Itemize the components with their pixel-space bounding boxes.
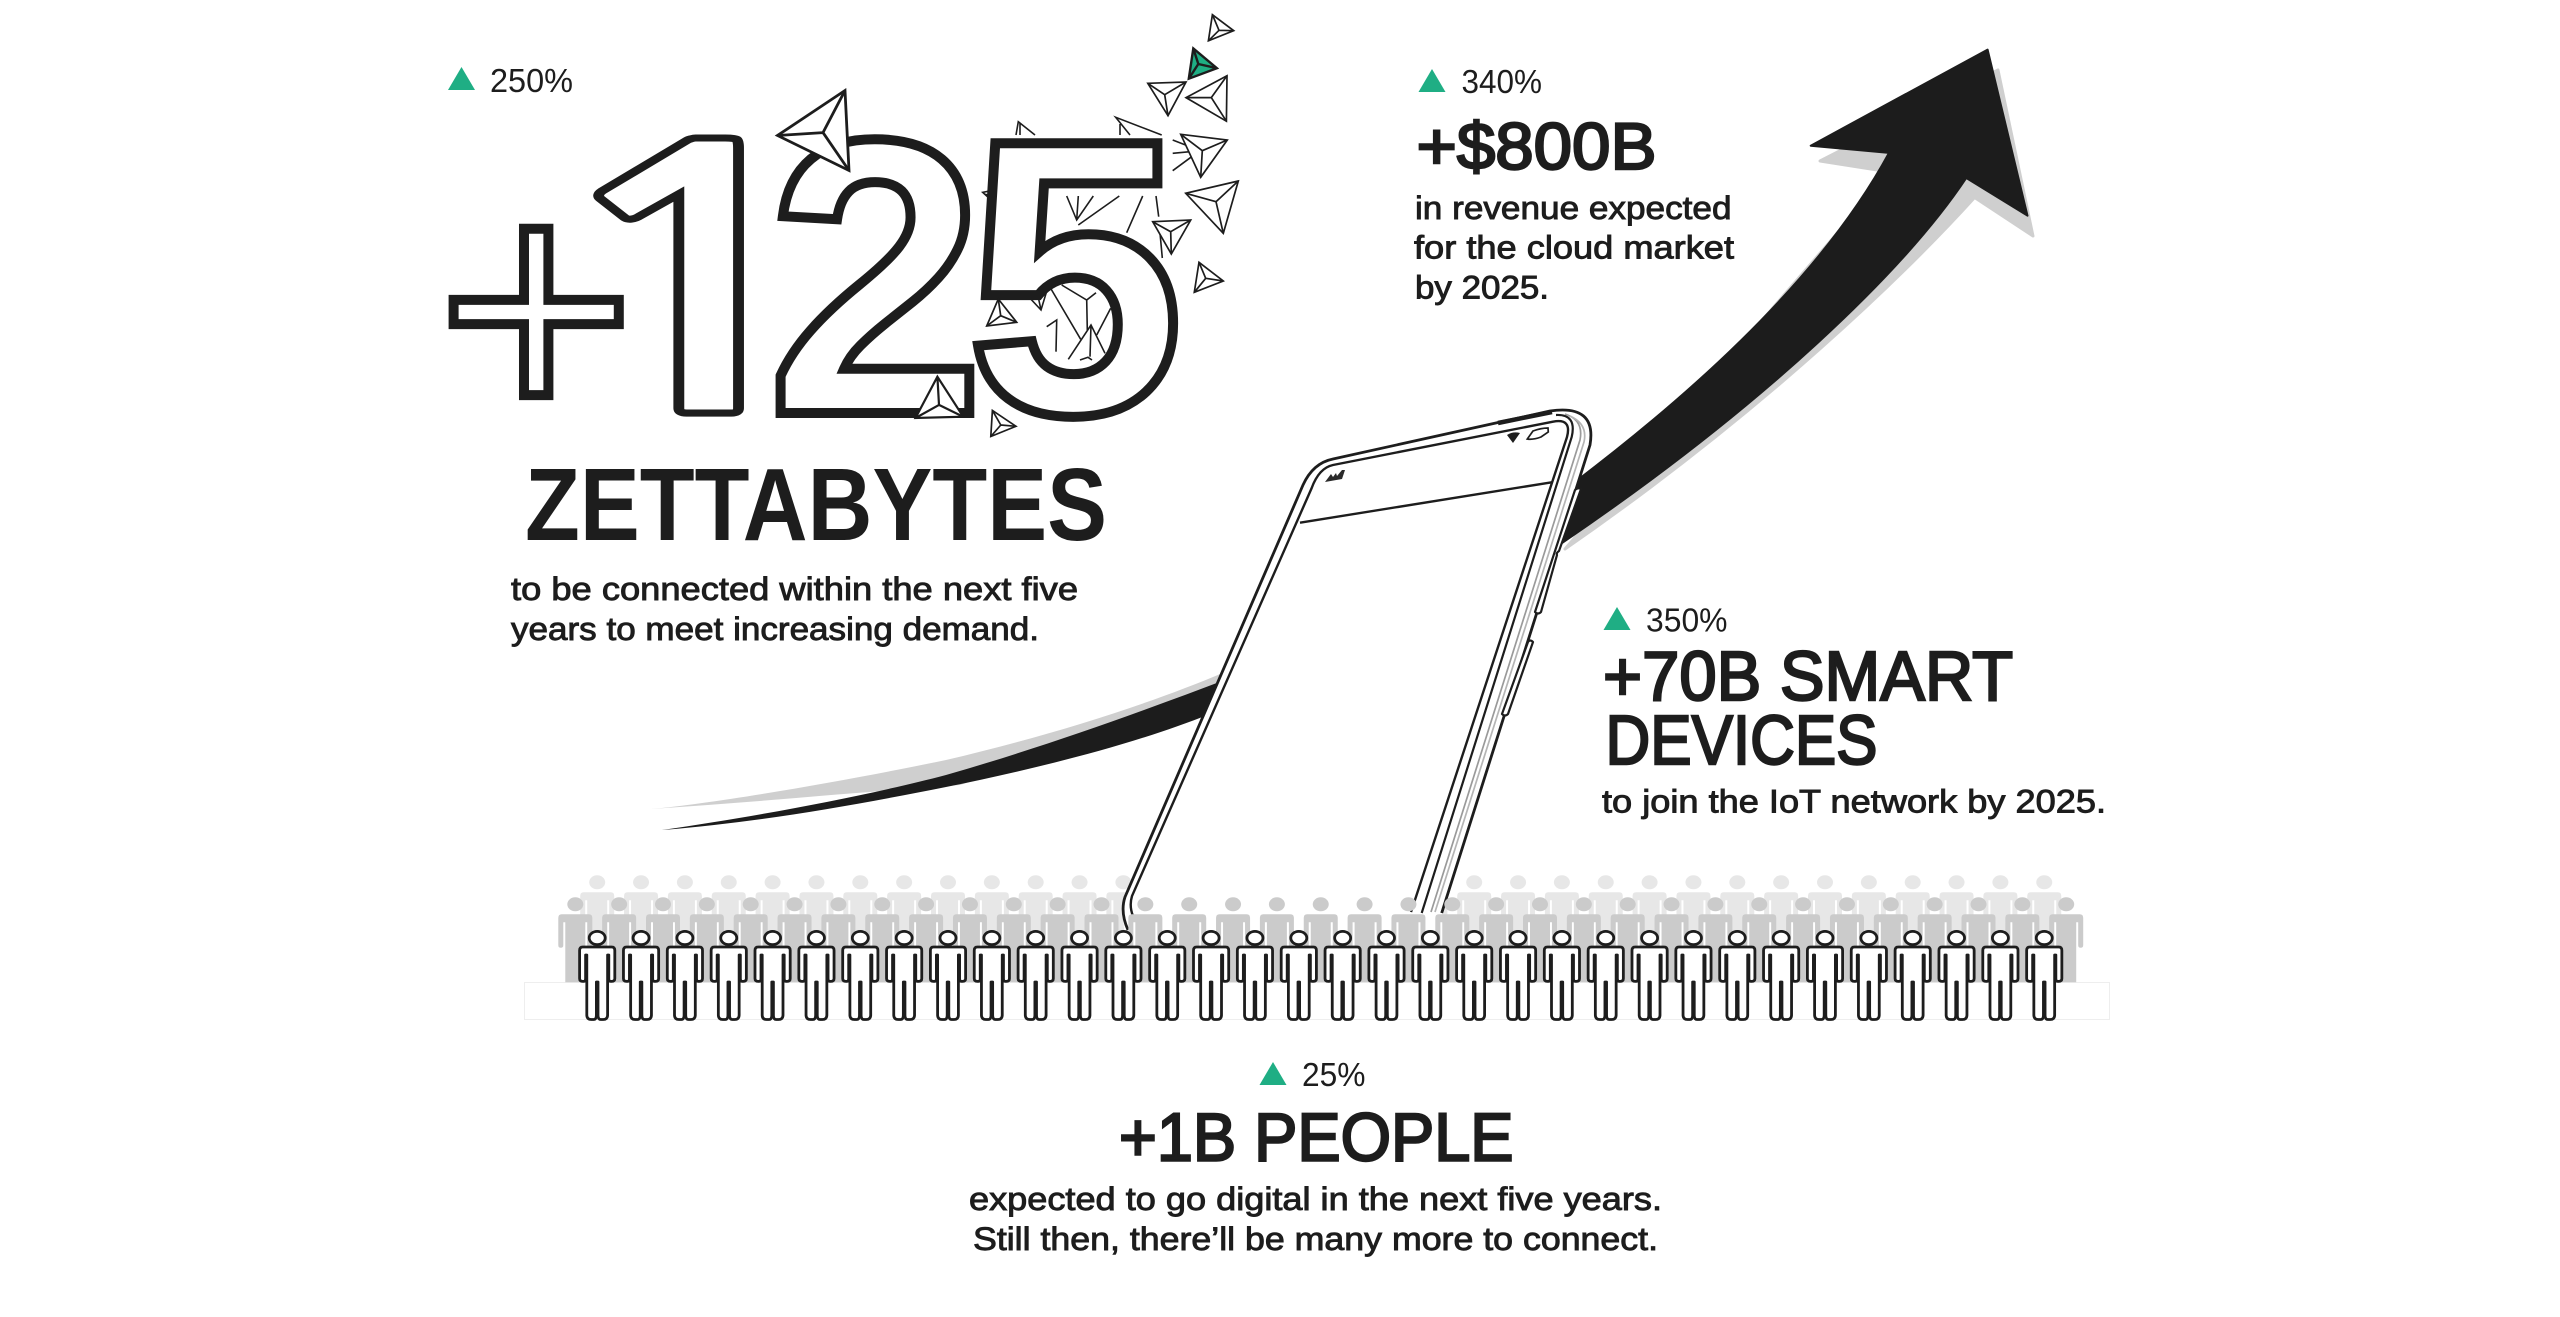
text: zettabytes description bbox=[511, 571, 1078, 647]
screen header divider bbox=[1300, 482, 1552, 523]
crowd: middle row bbox=[558, 897, 2083, 982]
text: zettabytes description: years to meet increasing demand. bbox=[511, 611, 1039, 647]
triangle bbox=[1181, 134, 1227, 177]
green triangle bbox=[1189, 48, 1217, 79]
triangle bbox=[1194, 262, 1223, 292]
triangle bbox=[1153, 220, 1191, 254]
large triangle over the 2 bbox=[778, 90, 849, 170]
digit 2: 2 bbox=[767, 59, 985, 497]
stat: 350%: 350% bbox=[1646, 602, 1728, 638]
crowd: back row bbox=[580, 875, 2061, 960]
icon: green up triangle 25% bbox=[1260, 1062, 1286, 1085]
icon: signal bars bbox=[1325, 470, 1345, 482]
heading: +70B SMART DEVICES: DEVICES bbox=[1606, 701, 1878, 779]
text: cloud market description bbox=[1414, 190, 1734, 306]
triangle bbox=[1186, 76, 1227, 121]
text: people description bbox=[969, 1181, 1662, 1257]
crowd: front row of outlined people bbox=[580, 931, 2062, 1020]
triangle bbox=[1186, 181, 1238, 233]
triangle bbox=[1148, 82, 1186, 116]
triangle on the 2 foot bbox=[916, 377, 963, 418]
growth arrow head and shaft bbox=[1562, 50, 2033, 549]
heading: +70B SMART DEVICES bbox=[1603, 637, 2013, 779]
text: cloud market description: in revenue expected bbox=[1415, 190, 1732, 226]
text: cloud market description: by 2025. bbox=[1415, 270, 1549, 306]
text: zettabytes description: to be connected within the next five bbox=[511, 571, 1078, 607]
heading: +$800B: +$800B bbox=[1416, 109, 1656, 183]
stat: 250%: 250% bbox=[490, 62, 573, 99]
triangle top bbox=[1208, 15, 1234, 41]
stat: 25%: 25% bbox=[1302, 1056, 1366, 1093]
heading: +1B PEOPLE: +1B PEOPLE bbox=[1119, 1100, 1514, 1176]
text: people description: Still then, there’ll be many more to connect. bbox=[973, 1221, 1658, 1257]
particle triangles bbox=[778, 15, 1238, 436]
icon: wifi bbox=[1507, 432, 1520, 443]
particle fragments behind the number bbox=[983, 117, 1192, 360]
heading: +70B SMART DEVICES: +70B SMART bbox=[1603, 637, 2013, 715]
big outlined number: +125 bbox=[437, 59, 1184, 498]
triangle by the 5 bbox=[987, 299, 1017, 326]
icon: green up triangle 250% bbox=[448, 67, 475, 90]
side button upper bbox=[1535, 488, 1581, 614]
icon: green up triangle 350% bbox=[1604, 607, 1630, 630]
heading: ZETTABYTES: ZETTABYTES bbox=[525, 447, 1107, 562]
triangle under the 5 bbox=[991, 410, 1016, 436]
growth arrow tail bbox=[651, 672, 1230, 830]
digit 1: 1 bbox=[527, 108, 865, 467]
crowd base platform bbox=[524, 982, 2110, 1020]
digit 5: 5 bbox=[966, 59, 1184, 497]
side button lower bbox=[1502, 640, 1533, 716]
icon: battery bbox=[1527, 428, 1548, 439]
text: IoT description: to join the IoT network by 2025. bbox=[1602, 784, 2106, 820]
stat: 340%: 340% bbox=[1462, 63, 1542, 100]
text: people description: expected to go digital in the next five years. bbox=[969, 1181, 1662, 1217]
plus sign: + bbox=[437, 118, 636, 498]
text: cloud market description: for the cloud market bbox=[1414, 230, 1734, 266]
icon: green up triangle 340% bbox=[1418, 69, 1446, 92]
smartphone bbox=[1123, 410, 1591, 965]
